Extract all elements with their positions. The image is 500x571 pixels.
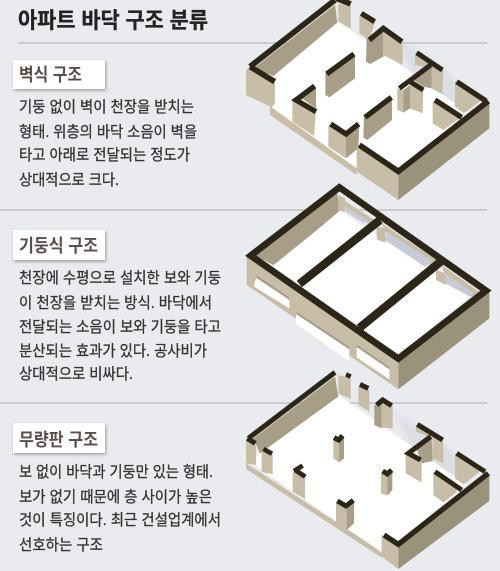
label: wall structure: 벽식 구조 (19, 65, 82, 85)
description: column structure: 전달되는 소음이 보와 기둥을 타고 (19, 318, 221, 336)
diagram: flat slab structure 3D model (246, 372, 489, 569)
panel: flat slab structure text (13, 423, 221, 554)
description: flat slab structure: 것이 특징이다. 최근 건설업계에서 (19, 511, 221, 529)
description: flat slab structure: 보 없이 바닥과 기둥만 있는 형태. (19, 463, 213, 481)
description: column structure: 분산되는 효과가 있다. 공사비가 (19, 342, 207, 360)
description: wall structure: 타고 아래로 전달되는 정도가 (19, 146, 190, 164)
label: flat slab structure (13, 423, 105, 453)
description: wall structure: 형태. 위층의 바닥 소음이 벽을 (19, 123, 197, 141)
description: column structure: 상대적으로 비싸다. (19, 365, 133, 383)
description: column structure: 이 천장을 받치는 방식. 바닥에서 (19, 294, 212, 312)
windows in front wall (254, 275, 389, 379)
panel: wall structure text (13, 60, 197, 189)
description: wall structure: 상대적으로 크다. (19, 171, 119, 189)
title: 아파트 바닥 구조 분류 (18, 8, 208, 33)
description: wall structure (19, 98, 197, 189)
description: wall structure: 기둥 없이 벽이 천장을 받치는 (19, 98, 194, 116)
label: column structure (13, 230, 105, 260)
label: column structure: 기둥식 구조 (19, 236, 98, 256)
label: flat slab structure: 무량판 구조 (19, 430, 98, 450)
description: flat slab structure (19, 463, 221, 554)
panel: column structure text (13, 230, 221, 383)
diagram: wall structure 3D model (246, 0, 489, 200)
description: flat slab structure: 보가 없기 때문에 층 사이가 높은 (19, 488, 212, 506)
description: column structure (19, 269, 221, 383)
description: flat slab structure: 선호하는 구조 (19, 536, 103, 554)
diagram: column structure 3D model (247, 187, 489, 389)
description: column structure: 천장에 수평으로 설치한 보와 기둥 (19, 269, 221, 287)
label: wall structure (13, 60, 105, 89)
section divider lines (0, 43, 487, 403)
